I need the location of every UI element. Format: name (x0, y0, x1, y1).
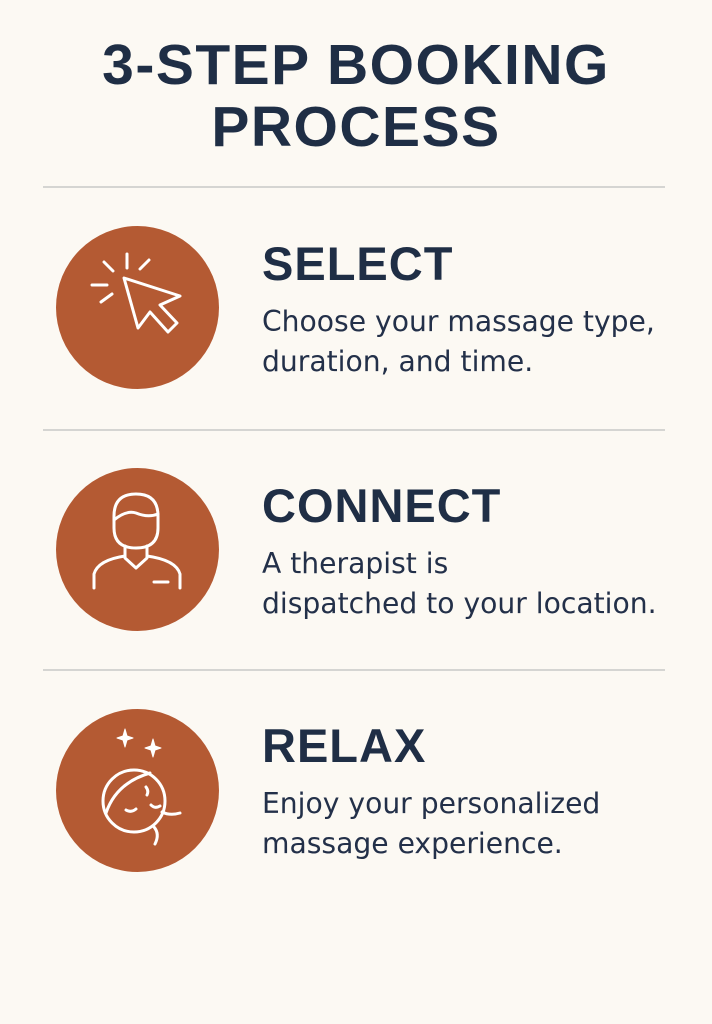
heading: relax: RELAX (262, 719, 426, 772)
heading: connect: CONNECT (262, 479, 501, 532)
text: connect: A therapist is (262, 547, 448, 580)
heading: select: SELECT (262, 237, 453, 290)
text: connect (262, 547, 657, 620)
text: relax: Enjoy your personalized (262, 787, 600, 820)
text: connect: dispatched to your location. (262, 587, 657, 620)
icon: cursor click (56, 226, 219, 389)
title: PROCESS (211, 95, 501, 159)
text: select: Choose your massage type, (262, 305, 655, 338)
text: relax: massage experience. (262, 827, 563, 860)
text: select: duration, and time. (262, 345, 533, 378)
title (102, 33, 610, 159)
icon: relaxed face (56, 709, 219, 872)
icon: therapist (56, 468, 219, 631)
text: select (262, 305, 655, 378)
title: 3-STEP BOOKING (102, 33, 610, 97)
text: relax (262, 787, 600, 860)
